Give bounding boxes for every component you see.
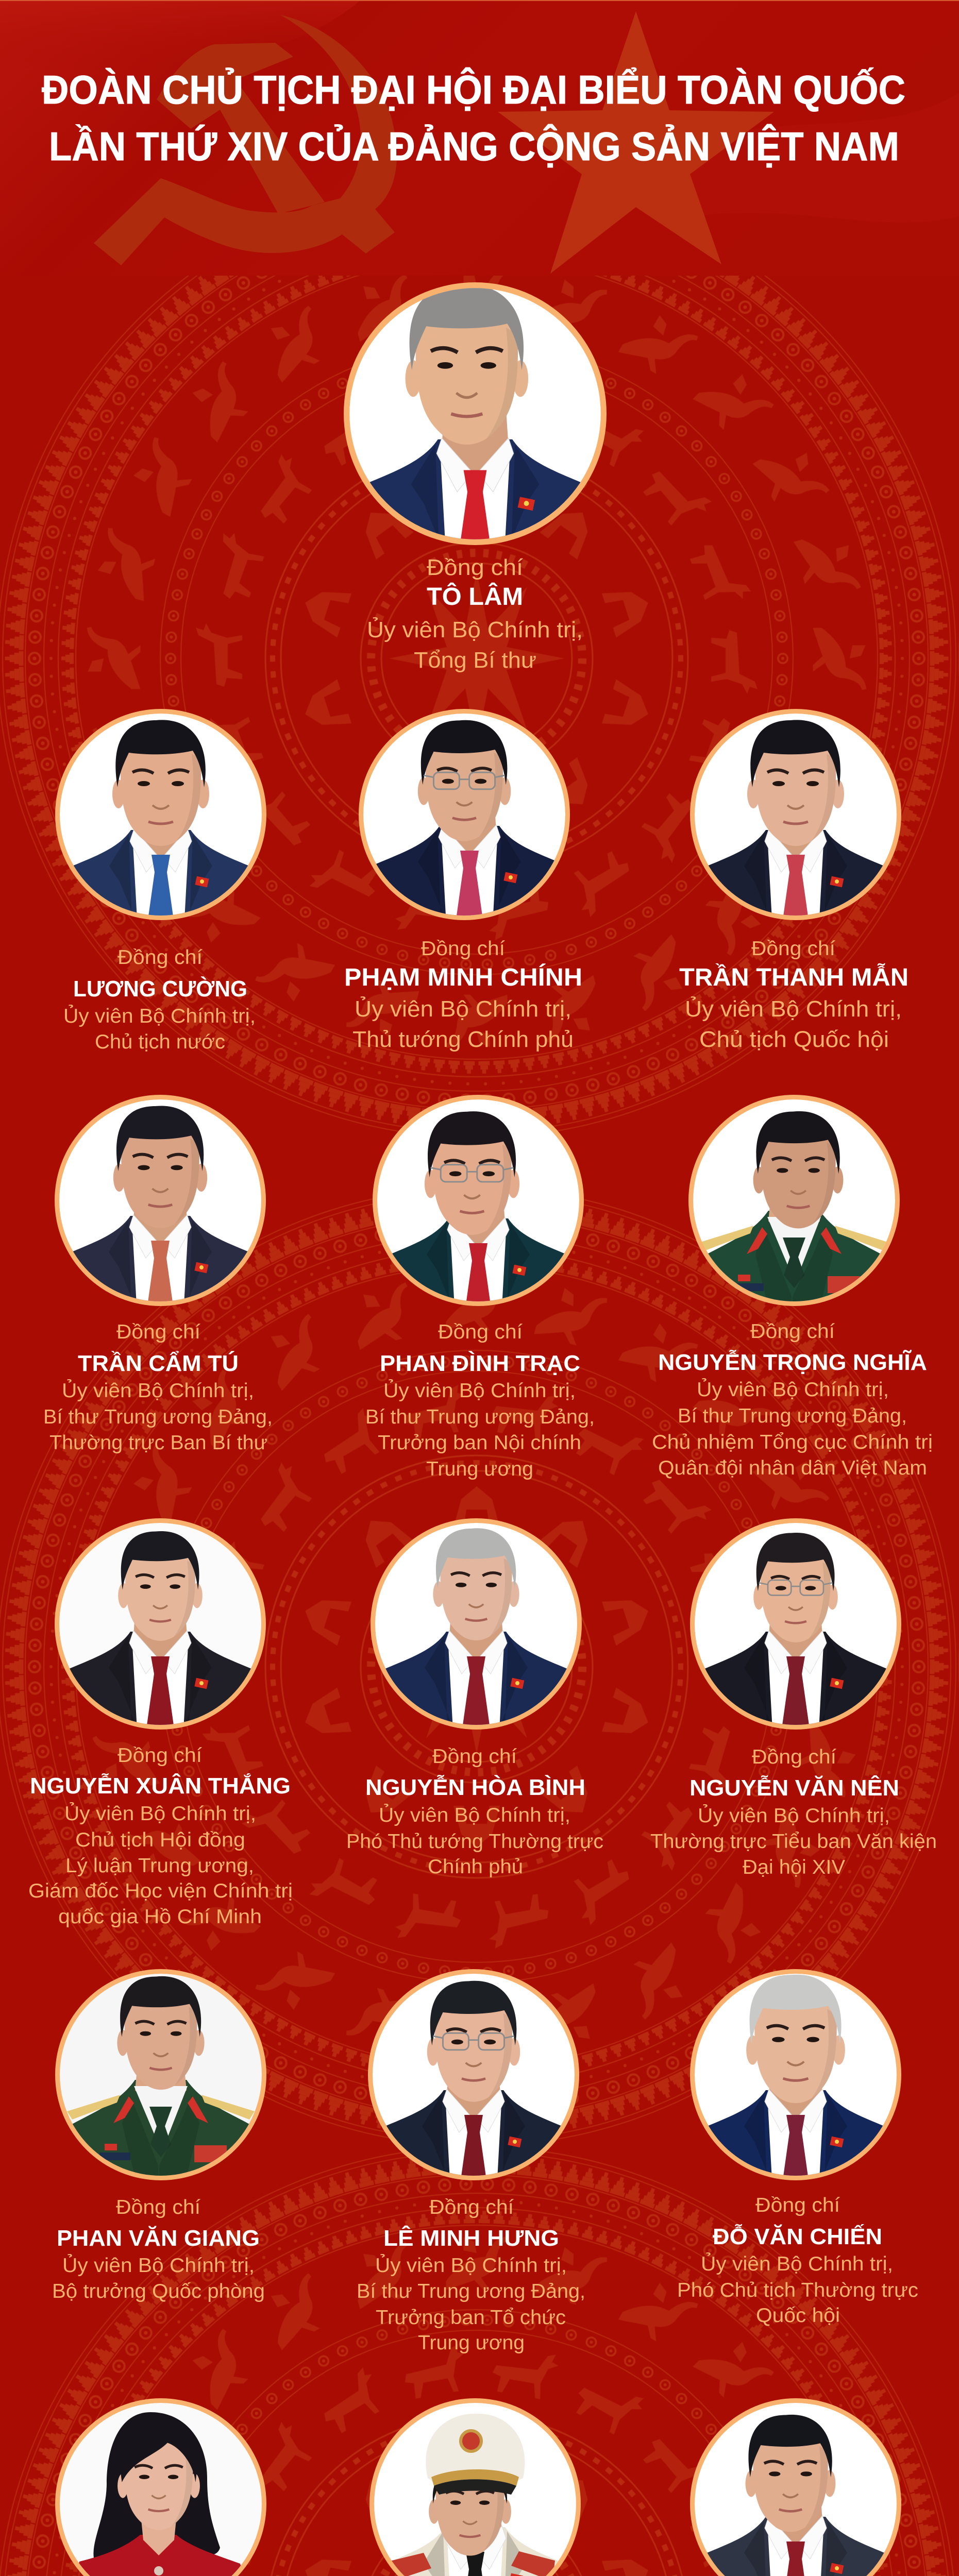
member: Trần Thanh Mẫn bbox=[679, 709, 908, 1052]
portrait bbox=[55, 1095, 266, 1324]
caption bbox=[365, 1321, 595, 1480]
caption: TÔ LÂM bbox=[427, 582, 523, 611]
caption bbox=[357, 2196, 585, 2354]
caption: Tổng Bí thư bbox=[414, 648, 536, 673]
caption: Trưởng ban Nội chính bbox=[378, 1432, 581, 1454]
caption: Bí thư Trung ương Đảng, bbox=[43, 1406, 273, 1428]
caption: Ủy viên Bộ Chính trị, bbox=[685, 995, 902, 1022]
caption: Thường trực Ban Bí thư bbox=[49, 1432, 267, 1454]
caption: Đồng chí bbox=[116, 2196, 200, 2218]
caption bbox=[367, 555, 583, 673]
caption: Đồng chí bbox=[429, 2196, 514, 2218]
member: Tô Lâm bbox=[344, 282, 607, 673]
caption: ĐỖ VĂN CHIẾN bbox=[713, 2223, 882, 2249]
caption: Đồng chí bbox=[117, 946, 203, 969]
caption: Ủy viên Bộ Chính trị, bbox=[375, 2254, 567, 2277]
caption: Chủ tịch Quốc hội bbox=[699, 1027, 889, 1052]
title bbox=[42, 67, 905, 169]
drum pattern top bbox=[0, 276, 959, 1139]
caption: Ủy viên Bộ Chính trị, bbox=[698, 1804, 890, 1827]
caption bbox=[677, 2194, 918, 2327]
caption: TRẦN THANH MẪN bbox=[679, 963, 908, 991]
member: Nguyễn Hòa Bình bbox=[346, 1518, 603, 1878]
drum pattern bottom bbox=[0, 2145, 959, 2576]
caption: LÊ MINH HƯNG bbox=[383, 2225, 559, 2251]
caption: Đồng chí bbox=[438, 1321, 523, 1343]
portrait bbox=[371, 1518, 582, 1740]
caption: Chủ nhiệm Tổng cục Chính trị bbox=[652, 1431, 933, 1453]
member: Lê Minh Hưng bbox=[357, 1969, 585, 2354]
caption: NGUYỄN HÒA BÌNH bbox=[365, 1774, 585, 1800]
caption: Trung ương bbox=[426, 1458, 533, 1480]
caption: NGUYỄN VĂN NÊN bbox=[689, 1775, 899, 1801]
portrait bbox=[690, 2398, 901, 2576]
portrait bbox=[690, 1969, 901, 2198]
caption: Ủy viên Bộ Chính trị, bbox=[62, 1379, 254, 1402]
caption: Ủy viên Bộ Chính trị, bbox=[383, 1379, 576, 1402]
caption: Ủy viên Bộ Chính trị, bbox=[379, 1804, 570, 1826]
caption: Đại hội XIV bbox=[743, 1856, 845, 1878]
caption: Phó Thủ tướng Thường trực bbox=[346, 1831, 603, 1853]
caption bbox=[52, 2196, 265, 2302]
caption: Bí thư Trung ương Đảng, bbox=[357, 2280, 585, 2302]
icon: star bbox=[498, 11, 774, 274]
caption: Ủy viên Bộ Chính trị, bbox=[367, 616, 583, 642]
caption: NGUYỄN XUÂN THẮNG bbox=[30, 1773, 291, 1799]
caption: Ủy viên Bộ Chính trị, bbox=[62, 2254, 255, 2277]
caption: Quốc hội bbox=[756, 2304, 840, 2327]
caption: NGUYỄN TRỌNG NGHĨA bbox=[658, 1349, 927, 1375]
caption: Đồng chí bbox=[421, 938, 505, 960]
member: Trần Cẩm Tú bbox=[43, 1095, 273, 1454]
caption: TRẦN CẨM TÚ bbox=[78, 1350, 239, 1376]
caption bbox=[43, 1321, 273, 1454]
caption: Ủy viên Bộ Chính trị, bbox=[64, 1802, 256, 1825]
portrait bbox=[55, 1969, 266, 2198]
member: Phan Đình Trạc bbox=[365, 1095, 595, 1480]
caption: Đồng chí bbox=[751, 938, 835, 960]
caption: Bí thư Trung ương Đảng, bbox=[678, 1405, 907, 1427]
caption bbox=[63, 946, 256, 1053]
portrait bbox=[55, 2398, 266, 2576]
caption: quốc gia Hồ Chí Minh bbox=[58, 1906, 262, 1928]
caption: Ủy viên Bộ Chính trị, bbox=[355, 995, 571, 1022]
portrait bbox=[690, 1518, 901, 1740]
member: Đỗ Văn Chiến bbox=[677, 1969, 918, 2327]
caption: Thủ tướng Chính phủ bbox=[352, 1027, 574, 1052]
portrait bbox=[368, 1969, 579, 2198]
caption: Ủy viên Bộ Chính trị, bbox=[63, 1005, 256, 1027]
caption bbox=[344, 938, 582, 1052]
caption: Đồng chí bbox=[427, 555, 524, 580]
member: Bùi Thị Minh Hoài bbox=[10, 2398, 322, 2576]
caption: LƯƠNG CƯỜNG bbox=[73, 976, 247, 1002]
caption: Đồng chí bbox=[116, 1321, 200, 1343]
portrait bbox=[359, 709, 573, 934]
caption: PHẠM MINH CHÍNH bbox=[344, 963, 582, 991]
caption: Đồng chí bbox=[432, 1745, 517, 1768]
member: Phan Văn Giang bbox=[52, 1969, 266, 2302]
caption: Chính phủ bbox=[428, 1856, 523, 1878]
caption: Chủ tịch Hội đồng bbox=[75, 1829, 245, 1851]
caption: PHAN VĂN GIANG bbox=[57, 2225, 260, 2251]
caption: Quân đội nhân dân Việt Nam bbox=[658, 1457, 927, 1479]
caption: Trưởng ban Tổ chức bbox=[376, 2307, 566, 2329]
caption: Bộ trưởng Quốc phòng bbox=[52, 2280, 265, 2302]
caption: Trung ương bbox=[418, 2332, 525, 2354]
portrait bbox=[373, 1095, 584, 1327]
member: Nguyễn Trọng Nghĩa bbox=[652, 1095, 933, 1479]
caption: Đồng chí bbox=[752, 1746, 836, 1768]
member: Lương Tam Quang bbox=[357, 2398, 590, 2576]
drum pattern middle bbox=[0, 1186, 959, 2145]
caption: Đồng chí bbox=[750, 1320, 835, 1343]
header flag bbox=[0, 0, 959, 276]
member: Phạm Minh Chính bbox=[344, 709, 582, 1052]
portrait bbox=[344, 282, 607, 574]
icon: hammer and sickle bbox=[94, 15, 397, 265]
caption: Thường trực Tiểu ban Văn kiện bbox=[650, 1831, 937, 1853]
member: Nguyễn Duy Ngọc bbox=[678, 2398, 908, 2576]
title: ĐOÀN CHỦ TỊCH ĐẠI HỘI ĐẠI BIỂU TOÀN QUỐC bbox=[42, 67, 905, 112]
caption: PHAN ĐÌNH TRẠC bbox=[380, 1350, 580, 1376]
member: Lương Cường bbox=[55, 709, 266, 1053]
portrait bbox=[690, 709, 901, 938]
portrait bbox=[369, 2398, 581, 2576]
caption: Chủ tịch nước bbox=[95, 1031, 225, 1053]
caption bbox=[28, 1744, 293, 1928]
caption: Phó Chủ tịch Thường trực bbox=[677, 2279, 918, 2301]
portrait bbox=[55, 1518, 266, 1740]
caption: Đồng chí bbox=[117, 1744, 202, 1767]
caption: Ủy viên Bộ Chính trị, bbox=[701, 2252, 893, 2275]
caption bbox=[650, 1746, 937, 1878]
title: LẦN THỨ XIV CỦA ĐẢNG CỘNG SẢN VIỆT NAM bbox=[49, 124, 899, 169]
caption: Lý luận Trung ương, bbox=[65, 1855, 254, 1877]
portrait bbox=[55, 709, 266, 938]
caption: Ủy viên Bộ Chính trị, bbox=[697, 1378, 889, 1401]
caption: Bí thư Trung ương Đảng, bbox=[365, 1406, 595, 1428]
caption: Giám đốc Học viện Chính trị bbox=[28, 1880, 293, 1902]
caption bbox=[346, 1745, 603, 1878]
member: Nguyễn Văn Nên bbox=[650, 1518, 937, 1878]
portrait bbox=[688, 1095, 900, 1329]
member: Nguyễn Xuân Thắng bbox=[28, 1518, 293, 1928]
caption bbox=[679, 938, 908, 1052]
caption bbox=[652, 1320, 933, 1479]
caption: Đồng chí bbox=[755, 2194, 840, 2216]
